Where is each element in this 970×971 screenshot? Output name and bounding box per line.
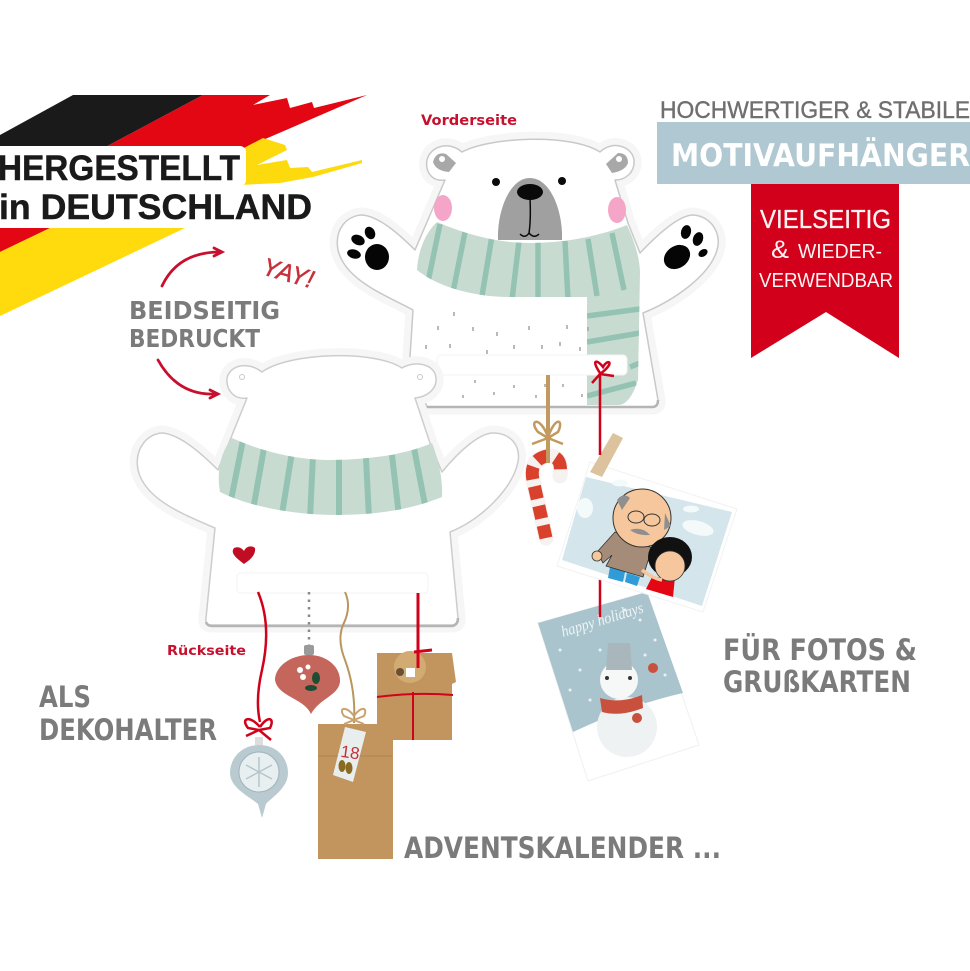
back polar bear hanger	[137, 356, 518, 626]
paws	[346, 224, 709, 274]
hanger slot	[237, 573, 428, 593]
label: for photos and cards: GRUßKARTEN	[723, 665, 911, 699]
label: printed on both sides: BEIDSEITIG	[129, 296, 280, 325]
banner: motif hanger	[657, 122, 970, 184]
red string with bow	[592, 362, 614, 455]
red string over card	[599, 575, 601, 617]
clothespin	[590, 433, 623, 477]
scarf	[219, 438, 442, 515]
advent calendar bag: 18	[339, 742, 361, 763]
label: advent calendar: ADVENTSKALENDER ...	[404, 831, 721, 865]
hanging silver ornament	[230, 592, 288, 818]
label: as decoration holder	[39, 680, 217, 747]
snow dots	[560, 610, 665, 700]
exclamation: yay: YAY!	[259, 253, 317, 294]
hanging red ornament	[275, 592, 340, 714]
scarf	[417, 222, 640, 405]
heading: made in Germany: HERGESTELLT	[0, 149, 240, 188]
cheeks	[434, 195, 452, 221]
greeting card	[538, 592, 699, 781]
heading: made in Germany: in DEUTSCHLAND	[0, 188, 312, 227]
bear outline	[337, 139, 718, 407]
heart	[233, 546, 255, 564]
label: front side: Vorderseite	[421, 113, 517, 129]
ribbon: versatile and reusable: WIEDER-	[798, 241, 882, 263]
advent calendar bag	[318, 592, 393, 859]
label: printed on both sides: BEDRUCKT	[129, 324, 260, 353]
candy cane	[532, 375, 563, 538]
front polar bear hanger	[337, 139, 718, 407]
ribbon: versatile and reusable: VIELSEITIG	[760, 204, 891, 234]
arrow: top curved	[162, 248, 222, 286]
arrow: bottom curved	[158, 360, 218, 398]
ribbon: versatile and reusable: VERWENDBAR	[759, 270, 893, 292]
clouds	[681, 517, 715, 539]
ribbon: versatile and reusable	[751, 184, 899, 358]
label: for photos and cards: FÜR FOTOS &	[723, 633, 917, 667]
label: for photos and cards	[723, 633, 917, 699]
german flag swoosh	[0, 95, 367, 316]
card greeting: happy holidays	[559, 600, 645, 641]
photo with clothespin	[557, 433, 737, 612]
ribbon: versatile and reusable: &	[771, 236, 789, 264]
label: as decoration holder: ALS	[39, 680, 91, 714]
hanger slot	[437, 355, 627, 375]
heading: made in Germany	[0, 149, 312, 227]
label: back side: Rückseite	[167, 644, 246, 659]
face	[498, 178, 562, 240]
child	[646, 577, 675, 597]
grandfather	[608, 567, 625, 582]
infographic canvas	[0, 95, 970, 859]
ears	[433, 153, 456, 172]
snowman	[597, 697, 657, 757]
label: printed on both sides	[129, 296, 280, 353]
belly dots	[426, 312, 588, 398]
advent calendar box	[377, 593, 456, 740]
label: as decoration holder: DEKOHALTER	[39, 713, 217, 747]
outline	[137, 356, 518, 625]
